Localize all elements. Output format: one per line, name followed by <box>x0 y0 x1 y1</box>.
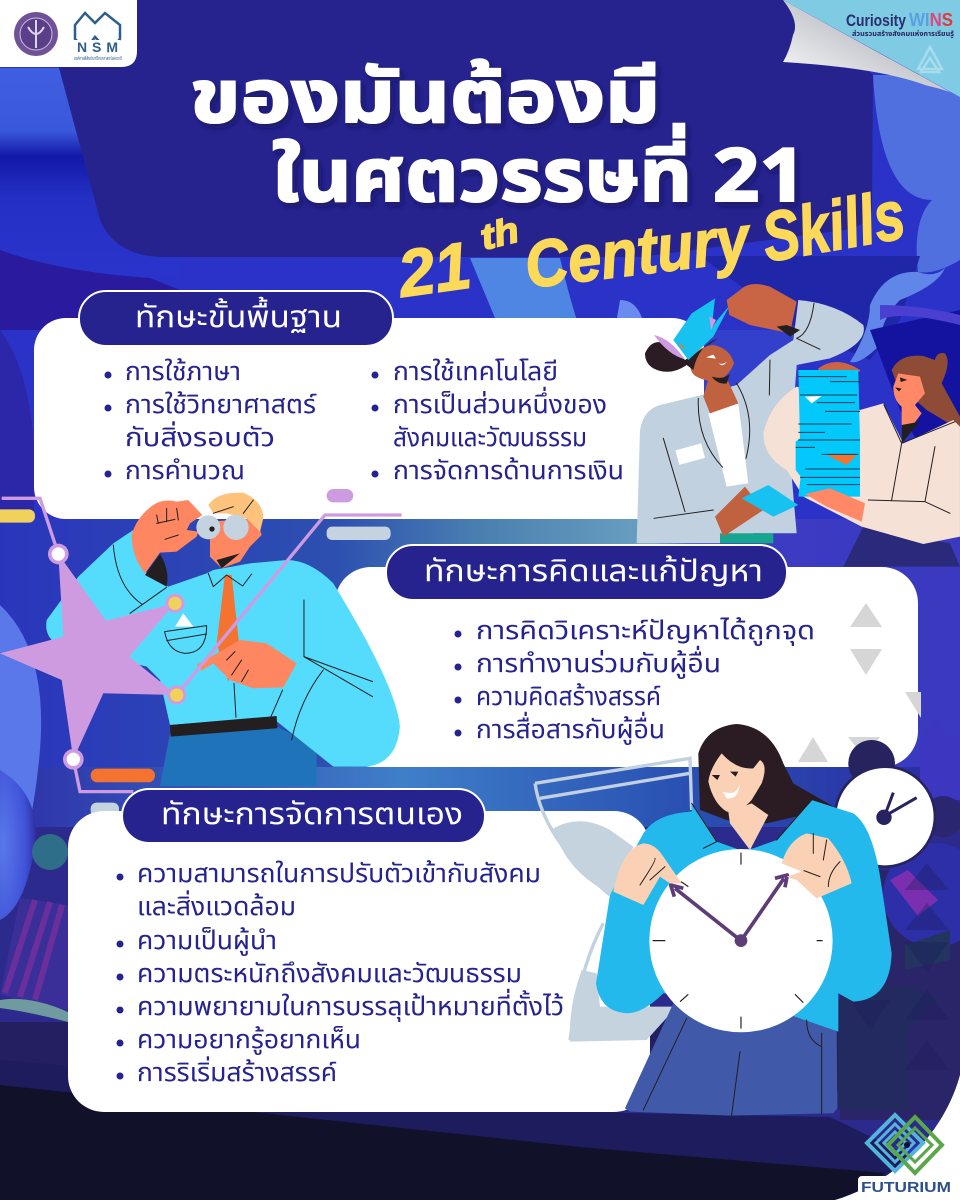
NSM logo <box>74 13 122 63</box>
man jacket <box>637 300 864 543</box>
hair <box>698 724 837 823</box>
heading <box>386 545 787 600</box>
subtitle: 21th Century Skills: Skills <box>756 175 910 277</box>
star chart <box>0 498 402 792</box>
illustration: two people with paper stack <box>637 284 960 567</box>
list: การคิดวิเคราะห์ปัญหาได้ถูกจุด <box>476 611 815 651</box>
shirt <box>46 530 400 767</box>
list: ความพยายามในการบรรลุเป้าหมายที่ตั้งไว้ <box>137 987 564 1027</box>
title panel <box>30 0 873 257</box>
list right: การจัดการด้านการเงิน <box>393 451 624 491</box>
skirt <box>625 1003 837 1116</box>
heading <box>122 789 485 843</box>
tie <box>217 575 239 682</box>
woman skirt <box>843 527 960 567</box>
hourglass <box>535 758 692 1042</box>
raised hand <box>132 500 202 573</box>
clock <box>649 849 833 1032</box>
man hair <box>645 338 718 372</box>
emblem <box>14 12 58 56</box>
belt <box>170 716 277 737</box>
panel: basic skills <box>34 291 704 519</box>
logo: Curiosity Wins: Curiosity <box>846 11 906 30</box>
shirt <box>596 800 892 1032</box>
list: ความเป็นผู้นำ <box>137 921 277 961</box>
footer white corner <box>835 1075 960 1200</box>
list left <box>104 352 317 491</box>
heading: ทักษะการคิดและแก้ปัญหา <box>424 549 763 595</box>
bottom floor <box>0 1060 960 1200</box>
illustration: woman holding clock <box>535 724 960 1116</box>
subtitle: 21th Century Skills: 21 <box>392 228 475 311</box>
jacket line details <box>654 303 955 518</box>
glasses <box>196 515 249 540</box>
man neck and head <box>703 373 738 413</box>
subtitle: 21th Century Skills <box>392 175 910 311</box>
page curl corner <box>783 0 960 97</box>
NSM logo: องค์การพิพิธภัณฑ์วิทยาศาสตร์แห่งชาติ <box>74 55 122 63</box>
logo: Futurium: FUTURIUM <box>861 1179 951 1196</box>
list left: กับสิ่งรอบตัว <box>125 418 275 458</box>
heading <box>79 291 393 346</box>
right lower scene <box>840 870 960 1120</box>
cuff <box>145 554 167 587</box>
heading: ทักษะขั้นพื้นฐาน <box>135 295 342 341</box>
NSM logo: NSM <box>77 39 118 55</box>
man pants <box>720 533 773 543</box>
lower hand and note <box>715 487 763 537</box>
logo: Futurium <box>858 1115 954 1196</box>
paper stack <box>818 362 860 372</box>
list right <box>372 352 624 491</box>
title: ของมันต้องมี <box>190 44 660 156</box>
right hand <box>782 833 852 898</box>
woman head <box>893 373 925 440</box>
illustration: man with glasses and star chart <box>0 489 402 817</box>
panel: thinking skills <box>335 545 921 767</box>
woman jacket <box>763 387 960 544</box>
list: และสิ่งแวดล้อม <box>137 887 296 927</box>
pills <box>0 489 391 817</box>
small clock <box>835 740 960 867</box>
list left: การคำนวณ <box>125 451 245 491</box>
logo: Curiosity Wins <box>846 10 954 40</box>
logo: Curiosity Wins: WINS <box>909 10 953 30</box>
list: ความคิดสร้างสรรค์ <box>476 677 661 717</box>
list: การริเริ่มสร้างสรรค์ <box>137 1053 337 1093</box>
list: การสื่อสารกับผู้อื่น <box>476 710 665 750</box>
list: การทำงานร่วมกับผู้อื่น <box>476 644 721 684</box>
panel: self-management skills <box>68 789 650 1112</box>
list <box>116 854 564 1093</box>
list: ความสามารถในการปรับตัวเข้ากับสังคม <box>137 854 541 894</box>
raised hand <box>727 284 797 333</box>
decorative triangles <box>798 603 921 762</box>
list right: การเป็นส่วนหนึ่งของ <box>393 385 607 425</box>
hair <box>208 493 263 532</box>
logo: Curiosity Wins: ส่วนรวมสร้างสังคมแห่งการเรียนรู้ <box>852 30 954 40</box>
title: ในศตวรรษที่ 21 <box>272 123 806 235</box>
list: ความอยากรู้อยากเห็น <box>137 1020 361 1060</box>
list <box>454 611 815 750</box>
head <box>210 518 262 568</box>
title <box>190 44 806 235</box>
flying papers <box>673 298 730 360</box>
fingers and shirt lines <box>113 500 373 740</box>
subtitle: 21th Century Skills: th <box>476 209 523 258</box>
list: ความตระหนักถึงสังคมและวัฒนธรรม <box>137 954 522 994</box>
heading: ทักษะการจัดการตนเอง <box>161 792 463 838</box>
face <box>708 753 765 812</box>
pointing hand <box>197 640 297 688</box>
subtitle: 21th Century Skills: Century <box>521 201 756 302</box>
list right: การใช้เทคโนโลยี <box>393 352 558 392</box>
left hand <box>613 843 682 905</box>
keyboard scene <box>0 898 68 1010</box>
woman lower hand <box>805 488 865 522</box>
list left: การใช้วิทยาศาสตร์ <box>125 385 317 425</box>
list right: สังคมและวัฒนธรรม <box>393 418 587 458</box>
logo panel <box>0 0 137 67</box>
woman hair <box>892 353 960 430</box>
pants <box>160 727 317 786</box>
man shirt <box>708 403 748 487</box>
list left: การใช้ภาษา <box>125 352 241 392</box>
